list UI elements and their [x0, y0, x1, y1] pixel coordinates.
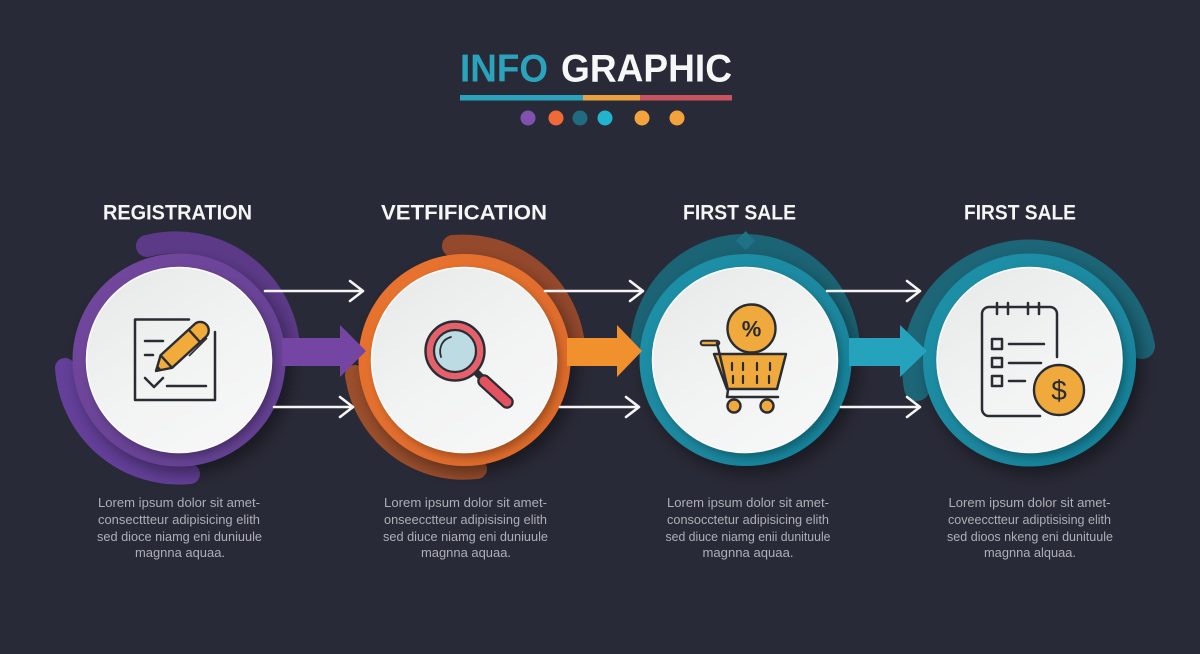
- step 4 description: sed dioos nkeng eni dunituule: [947, 530, 1113, 544]
- step 3 description: consocctetur adipisicing elith: [667, 513, 829, 527]
- icon: form with pencil: [135, 318, 215, 400]
- title: GRAPHIC: [561, 48, 732, 90]
- teal connector arrow: [849, 325, 927, 377]
- step 2 description: [383, 496, 548, 560]
- step 2 heading: VETFIFICATION: [381, 202, 547, 224]
- step 1 description: Lorem ipsum dolor sit amet-: [98, 496, 260, 510]
- step 4 disc: [937, 268, 1122, 452]
- step 1 disc: [86, 268, 272, 452]
- step 1 heading: REGISTRATION: [103, 202, 252, 224]
- orange connector arrow: [567, 325, 642, 377]
- step 2 ring with arcs: [355, 246, 574, 470]
- step 3 description: [666, 496, 831, 560]
- step 2 description: Lorem ipsum dolor sit amet-: [384, 496, 547, 510]
- step 3 description: Lorem ipsum dolor sit amet-: [667, 496, 829, 510]
- step 4 ring with arc: [915, 253, 1142, 466]
- step 2 disc: [372, 268, 556, 452]
- icon: checklist with dollar coin: $: [1051, 375, 1067, 406]
- step 2 description: onseecctteur adipisising elith: [384, 513, 547, 527]
- title: INFO: [460, 48, 548, 90]
- purple connector arrow: [282, 325, 366, 377]
- title: [460, 48, 732, 90]
- title underline: [460, 95, 732, 100]
- step 3 description: magnna aquaa.: [702, 546, 794, 560]
- step 2 description: magnna aquaa.: [421, 546, 511, 560]
- icon: checklist with dollar coin: [982, 303, 1084, 416]
- white arrow bottom 3: [841, 397, 920, 417]
- white arrow top 1: [265, 281, 363, 301]
- step 3 disc: [652, 268, 838, 452]
- step 3 heading: FIRST SALE: [683, 202, 796, 224]
- icon: shopping cart with discount coin: %: [742, 316, 761, 342]
- step 4 description: [947, 496, 1113, 560]
- icon: shopping cart with discount coin: [703, 304, 786, 412]
- step 1 description: consecttteur adipisicing elith: [98, 513, 260, 527]
- icon: magnifying glass: [426, 322, 507, 402]
- step 4 description: coveecctteur adiptisising elith: [948, 513, 1111, 527]
- white arrow bottom 1: [274, 397, 353, 417]
- white arrow bottom 2: [560, 397, 639, 417]
- step 4 description: magnna alquaa.: [984, 546, 1076, 560]
- step 2 description: sed diuce niamg eni duniuule: [383, 530, 548, 544]
- step 1 ring with arcs: [65, 242, 289, 475]
- step 3 ring with arc and top marker: [640, 231, 852, 466]
- step 4 description: Lorem ipsum dolor sit amet-: [948, 496, 1110, 510]
- step 1 description: sed dioce niamg eni duniuule: [97, 530, 262, 544]
- white arrow top 3: [827, 281, 920, 301]
- step 4 heading: FIRST SALE: [964, 202, 1076, 224]
- step 1 description: [97, 496, 262, 560]
- step 1 description: magnna aquaa.: [135, 546, 225, 560]
- step 3 description: sed diuce niamg enii dunituule: [666, 530, 831, 544]
- decorative colour dots: [520, 110, 684, 126]
- white arrow top 2: [545, 281, 643, 301]
